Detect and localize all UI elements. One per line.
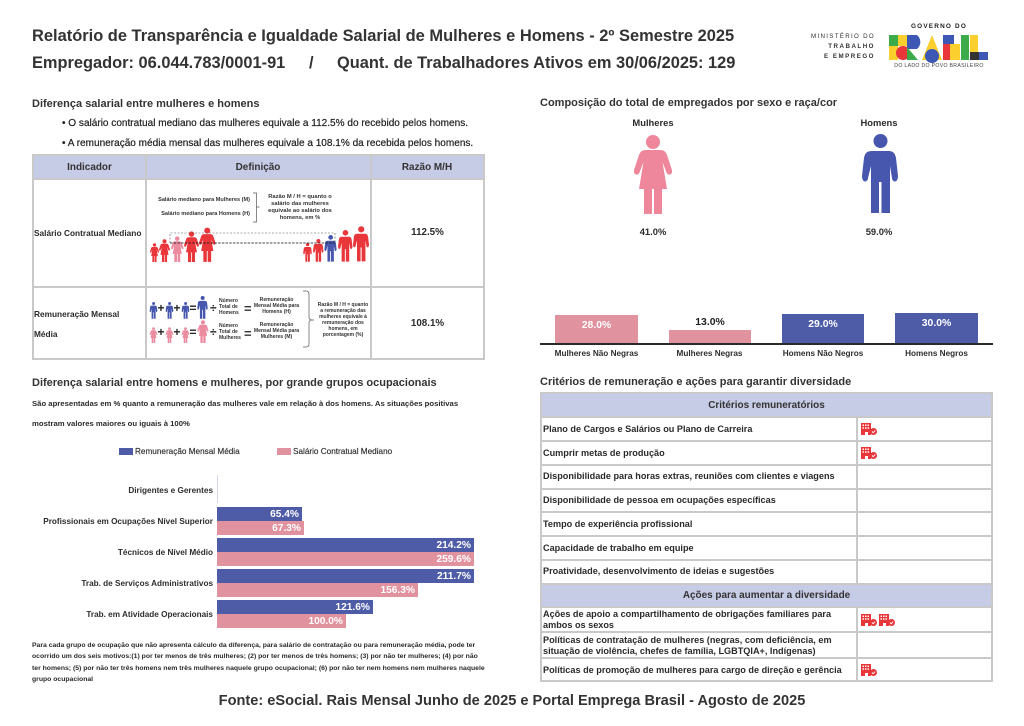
caption: número total mulheres: Total de [219,329,238,335]
chart legend [119,447,392,456]
action: contratação [543,635,832,656]
caption: remuneração homens [254,297,300,315]
bar: 65.4% [217,507,302,521]
title: Relatório de Transparência e Igualdade Salarial de Mulheres e Homens - 2º Semestre 2025 [32,27,734,45]
footnote: ocorrido um dos seis motivos:(1) por ter menos de três mulheres; (2) por ter menos de três homens; (3) por não ter mulheres; (4) por não [32,653,478,660]
icon: company check [861,447,877,459]
bar: 259.6% [217,552,474,566]
caption: equals signs [244,301,252,341]
caption: razão M/H: equivale ao salário dos [268,208,332,214]
criterion: plano de cargos: Plano de Cargos e Salários ou Plano de Carreira [543,424,752,434]
caption: remuneração homens: Homens (H) [262,309,291,315]
caption: número total homens: Número [219,298,238,304]
equation operators: + [158,325,165,339]
employer line: / [309,54,314,72]
action: contratação: Políticas de contratação de mulheres (negras, com deficiência, em [543,635,832,645]
equation operators: + [174,301,181,315]
bar: mulheres não negras [555,315,638,344]
legend: salário: Salário Contratual Mediano [293,447,392,456]
caption: salário mediano: Salário mediano para Homens (H) [161,211,250,217]
caption: número total homens: Total de [219,304,238,310]
equation operators [158,301,217,339]
bar: 121.6%: 121.6% [335,602,370,613]
axis [540,343,993,345]
action: contratação: situação de violência, chefes de família, LGBTQIA+, Indígenas) [543,646,816,656]
heading: composição: Composição do total de empregados por sexo e raça/cor [540,97,837,109]
header: ações diversidade: Ações para aumentar a diversidade [683,590,850,601]
intro text: mostram valores maiores ou iguais à 100% [32,419,190,428]
caption: salário mediano [158,197,250,217]
footnote: ter homens; (5) por não ter três homens nem três mulheres naquele grupo ocupacional; (6) por não ter nem homens nem mulheres naquele [32,665,485,672]
category: serviços: Trab. de Serviços Administrativos [81,579,213,588]
heading: critérios: Critérios de remuneração e ações para garantir diversidade [540,376,851,388]
icon: man [862,134,898,213]
category: operacionais: Trab. em Atividade Operacionais [86,610,213,619]
bullet text: salário contratual: • O salário contratual mediano das mulheres equivale a 112.5% do recebido pelos homens. [62,118,468,129]
header: ações diversidade [542,585,991,606]
caption: razão M/H remuneração: remuneração dos [322,320,364,326]
panel: indicator table [32,154,485,360]
heading: grupos ocupacionais: Diferença salarial entre homens e mulheres, por grande grupos ocupacionais [32,377,437,389]
row label: remuneração mensal média: Remuneração Mensal [34,309,119,319]
caption: razão M/H remuneração [318,302,368,338]
bar: 259.6%: 259.6% [436,554,471,565]
logo: Governo do Brasil [889,23,988,69]
label: homens: Homens [860,117,898,128]
caption: razão M/H remuneração: mulheres equivale à [319,314,367,320]
equation operators: + [174,325,181,339]
value: homens 59.0%: 59.0% [866,226,892,237]
bar: homens não negros: 29.0% [808,319,838,330]
bar: 65.4%: 65.4% [270,509,299,520]
criterion: ocupações específicas: Disponibilidade de pessoa em ocupações específicas [543,495,776,505]
row label: remuneração mensal média [34,309,119,339]
footnote: grupo ocupacional [32,676,93,683]
icon: company check [861,423,877,435]
caption: razão M/H remuneração: Razão M / H = quanto [318,302,368,308]
footnote: Para cada grupo de ocupação que não apresenta cálculo da diferença, para salário de contratação ou para remuneração média, pode ter [32,642,475,649]
bar: homens não negros [782,314,864,344]
caption: razão M/H: homens, em % [280,214,320,220]
bar: homens negros [895,313,978,344]
caption: número total mulheres: Mulheres [219,335,241,341]
caption: número total mulheres: Número [219,323,238,329]
criterion: capacidade: Capacidade de trabalho em equipe [543,543,694,553]
intro text [32,399,458,428]
caption: salário mediano: Salário mediano para Mulheres (M) [158,197,250,203]
category: dirigentes: Dirigentes e Gerentes [128,486,213,495]
logo: Ministério do Trabalho e Emprego: MINISTÉRIO DO [811,33,875,40]
logo: Ministério do Trabalho e Emprego: TRABALHO [828,43,875,50]
legend: remuneração: Remuneração Mensal Média [135,447,240,456]
header: critérios remuneratórios: Critérios remuneratórios [708,400,825,411]
criterion: tempo de experiência: Tempo de experiência profissional [543,519,692,529]
people equations [150,290,314,348]
source: Fonte: eSocial. Rais Mensal Junho de 2025 e Portal Emprega Brasil - Agosto de 2025 [219,693,805,709]
caption: razão M/H remuneração: homens, em [328,326,358,332]
row label: salário contratual mediano: Salário Contratual Mediano [34,228,141,238]
category: mulheres negras: Mulheres Negras [676,349,742,358]
action: apoio [543,609,832,630]
logo: Ministério do Trabalho e Emprego [811,32,875,60]
bar: 121.6% [217,600,373,614]
value: 13.0%: 13.0% [695,317,725,328]
employer line: Quant. de Trabalhadores Ativos em 30/06/2025: 129 [337,54,735,72]
action: apoio: ambos os sexos [543,620,614,630]
bar: 211.7% [217,569,474,583]
equation operators: ÷ [210,325,217,339]
bar: 214.2%: 214.2% [436,540,471,551]
icon: company check [861,614,877,626]
action: promoção: Políticas de promoção de mulheres para cargo de direção e gerência [543,665,842,675]
table header: Indicador [67,162,112,173]
label: mulheres: Mulheres [632,117,674,128]
bar: 100.0%: 100.0% [308,616,343,627]
bar: homens negros: 30.0% [922,318,951,329]
caption: razão M/H: Razão M / H = quanto o [268,194,332,200]
bullet text: remuneração média: • A remuneração média mensal das mulheres equivale a 108.1% da recebida pelos homens. [62,138,473,149]
caption: razão M/H remuneração: a remuneração das [320,308,366,314]
bar: 100.0% [217,614,346,628]
logo: Governo do Brasil: DO LADO DO POVO BRASILEIRO [894,63,984,69]
equation operators: = [190,301,197,315]
category: mulheres não negras: Mulheres Não Negras [555,349,638,358]
bar: 214.2% [217,538,474,552]
value 112.5%: 112.5% [411,227,444,238]
caption: equals signs: = [244,301,252,316]
action: apoio: Ações de apoio a compartilhamento de obrigações familiares para [543,609,831,619]
caption: número total homens [219,298,239,316]
caption: razão M/H remuneração: porcentagem (%) [323,332,363,338]
criterion: proatividade: Proatividade, desenvolvimento de ideias e sugestões [543,566,774,576]
icon: company check [861,664,877,676]
logo: Ministério do Trabalho e Emprego: E EMPREGO [824,53,875,60]
icon: woman [634,135,672,214]
caption: número total mulheres [219,323,241,341]
caption: remuneração mulheres [254,322,300,340]
heading: diferença salarial: Diferença salarial entre mulheres e homens [32,98,259,110]
category: homens não negros: Homens Não Negros [783,349,863,358]
criterion: metas: Cumprir metas de produção [543,448,665,458]
caption: equals signs: = [244,326,252,341]
equation operators: = [190,325,197,339]
caption: razão M/H [268,194,332,220]
bar: 67.3% [217,521,304,535]
value: mulheres 41.0%: 41.0% [640,226,666,237]
row label: remuneração mensal média: Média [34,329,58,339]
icon: company check [879,614,895,626]
bar: 67.3%: 67.3% [272,523,301,534]
caption: razão M/H: salário das mulheres [271,200,329,206]
caption: remuneração mulheres: Remuneração [260,322,293,328]
equation operators: + [158,301,165,315]
table header [34,156,483,178]
equation operators: ÷ [210,301,217,315]
caption: remuneração homens: Remuneração [260,297,293,303]
bar: 156.3%: 156.3% [380,585,415,596]
caption: remuneração homens: Mensal Média para [254,303,299,309]
people chart with median line [150,192,369,262]
footnote [32,642,485,683]
caption: remuneração mulheres: Mensal Média para [254,328,299,334]
employer line: Empregador: 06.044.783/0001-91 [32,54,285,72]
panel: criteria table [540,392,993,682]
header: critérios remuneratórios [542,394,991,416]
bar: mulheres negras [669,330,751,344]
value 108.1%: 108.1% [411,318,444,329]
category: técnicos: Técnicos de Nível Médio [118,548,213,557]
bar chart: occupational groups [43,475,474,628]
employer line [32,54,735,72]
logo: Governo do Brasil: GOVERNO DO [911,23,967,30]
intro text: São apresentadas em % quanto a remuneração das mulheres vale em relação à dos homens. As situações positivas [32,399,458,408]
bar: 211.7%: 211.7% [437,571,471,582]
chart: race and sex composition [540,313,993,358]
category: profissionais: Profissionais em Ocupações Nível Superior [43,517,213,526]
diagram: salário contratual mediano [150,192,369,262]
caption: número total homens: Homens [219,310,239,316]
bar: mulheres não negras: 28.0% [582,320,611,331]
criterion: horas extras: Disponibilidade para horas extras, reuniões com clientes e viagens [543,471,835,481]
table header: Definição [236,162,280,173]
diagram: remuneração mensal média [150,290,368,348]
bar: 156.3% [217,583,418,597]
category: homens negros: Homens Negros [905,349,968,358]
table header: Razão M/H [402,162,452,173]
caption: remuneração mulheres: Mulheres (M) [261,334,292,340]
